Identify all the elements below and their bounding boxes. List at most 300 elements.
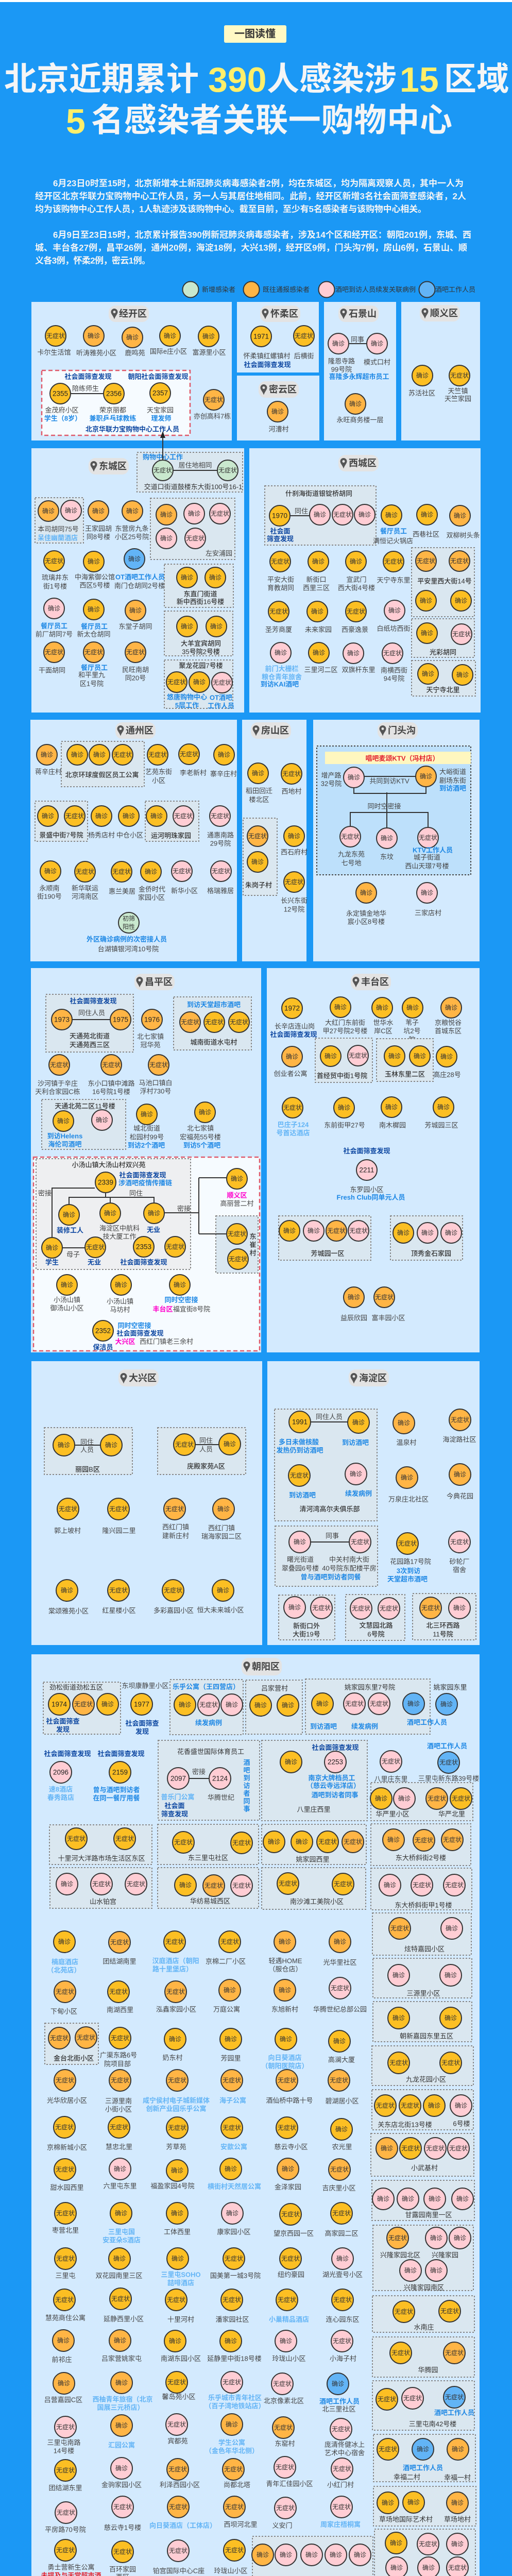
- cases row: 到访5个酒吧: [183, 1142, 220, 1149]
- box: 文慧园北路6号院: 文慧园北路: [359, 1622, 393, 1629]
- box: 清河湾高尔夫俱乐部: 续发病例: [345, 1490, 372, 1497]
- highlighted cluster: 小汤山镇: 大兴区: [115, 1337, 135, 1346]
- box: 东直门街道: 确诊: [181, 574, 193, 581]
- cases row: 大红门东前街: [325, 1019, 365, 1026]
- box: 小武基村: [371, 2133, 474, 2176]
- cases row: 确诊: [406, 1004, 419, 1011]
- cases: [243, 326, 314, 369]
- box: 曙光街道与中关村南大街: 中关村南大街: [329, 1556, 369, 1563]
- case: 冠华苑: 冠华苑: [140, 1041, 161, 1049]
- cases row: 无症状: [109, 1505, 128, 1513]
- box: 兴隆家园: 确诊: [404, 2267, 417, 2274]
- cases row: [37, 861, 234, 902]
- box: 三里屯南42号楼: 酒吧工作人员: [434, 2409, 474, 2416]
- box: 水南庄: 无症状: [440, 2307, 459, 2315]
- box: 左安浦园: 无症状: [211, 510, 229, 517]
- box: 什刹海街道: 确诊: [359, 511, 371, 518]
- case: 台湖镇银河湾10号院: 阳性: [123, 923, 135, 930]
- box: 八里庄西里: （慈云寺远洋店）: [306, 1782, 360, 1790]
- cases: 杨秀店村, 中仓小区: 确诊: [95, 812, 108, 820]
- box: 聚龙花园7号楼: 无症状: [213, 679, 231, 686]
- grid row 15: 无症状: [225, 2546, 244, 2554]
- cases row: 西巷社区: [413, 531, 439, 538]
- grid row 9: [45, 2288, 360, 2324]
- box: 朝新嘉园东里五区: 朝新嘉园东里五区: [400, 2032, 453, 2040]
- cases row: 确诊: [88, 606, 100, 613]
- box: 北京环球度假区员工公寓: [61, 741, 144, 787]
- cases row: 寨辛庄村: [210, 770, 237, 778]
- case: 台湖镇银河湾10号院: 初筛: [123, 914, 135, 922]
- box: 运河明珠家园: 确诊: [150, 812, 163, 820]
- grid row 2: 无症状: [56, 1988, 74, 1995]
- box: 天通北苑二区11号楼: [42, 1099, 126, 1149]
- grid row 1: [47, 1931, 357, 1974]
- box: 幸福二村, 幸福一村: 无症状: [379, 2445, 397, 2453]
- grid row 6: 无症状: [56, 2165, 74, 2173]
- box: 景盛中街7号院: 无症状: [65, 812, 84, 820]
- cases row: 确诊: [252, 770, 264, 777]
- highlighted cluster: 华联力宝购物中心: 理发师: [151, 414, 172, 422]
- box: 花香盛世国际体育员工: 筛查发现: [161, 1810, 188, 1818]
- grid row 2: 万庭公寓: [213, 2005, 240, 2013]
- cases row: 无症状: [180, 750, 198, 758]
- grid row 11: 西柚青年旅宿（北京: [92, 2396, 153, 2403]
- cases row: 坑2号: [403, 1027, 421, 1035]
- case: 王家园胡同8号楼: 确诊: [92, 507, 105, 515]
- cases row: 确诊: [44, 868, 57, 875]
- heading: 朝阳区: [242, 1658, 282, 1675]
- cases row: 确诊: [199, 1109, 211, 1116]
- cases: 今典花园: [447, 1492, 473, 1500]
- box: 天通苑西三区: 同住人员: [78, 1009, 105, 1017]
- cases row: 确诊: [385, 512, 398, 519]
- cases: 八里庄东里, 三里屯新东路: 酒吧工作人员: [427, 1742, 467, 1750]
- box: 姚家园东里7号院: 确诊: [316, 1700, 329, 1707]
- cases: 无症状: [450, 371, 469, 379]
- highlighted cluster: 小汤山镇: 确诊: [63, 1211, 75, 1218]
- cases row: 恒大未来城小区: [197, 1606, 244, 1614]
- highlighted cluster: 华联力宝购物中心: 2356: [106, 389, 122, 398]
- box: 东直门街道: 东直门街道: [183, 590, 217, 598]
- grid row 15: 玲珑山小区: [214, 2567, 248, 2575]
- location row: 无症状: [46, 332, 65, 340]
- grid row 14: 无症状: [169, 2503, 187, 2511]
- cases row: 红星楼小区: [102, 1606, 136, 1615]
- box: 九龙花园小区: [372, 2046, 473, 2086]
- box: 本司胡同75号: 本司胡同75号: [38, 526, 79, 533]
- box: 唱吧麦颂KTV cluster: 七号地: [341, 859, 362, 867]
- title: 区域: [444, 61, 509, 97]
- box: 姚家园东里7号院: 无症状: [345, 1700, 364, 1707]
- box: 小武基村: 小武基村: [411, 2164, 438, 2172]
- cases row: 无症状: [173, 867, 191, 875]
- box: 白家庄东里: 无症状: [448, 2564, 467, 2571]
- cases row: 和平里九: [78, 671, 105, 679]
- box: 十里河大洋路: [49, 1825, 152, 1865]
- box: 兴隆家园: 兴隆家园: [432, 2251, 458, 2259]
- cases row: 16号院1号楼: [92, 1088, 130, 1095]
- highlighted cluster: 小汤山镇: 确诊: [231, 1175, 243, 1182]
- highlighted cluster: 小汤山镇: 崔: [249, 1241, 257, 1249]
- cases: 益辰欣园, 富丰园小区: [340, 1287, 405, 1322]
- box: 清河湾高尔夫俱乐部: 无症状: [290, 1471, 309, 1479]
- cases row: 隆兴园二里: [102, 1527, 136, 1534]
- grid row 3: 向日葵酒店: [268, 2054, 302, 2062]
- location row: [37, 326, 226, 357]
- highlighted cluster: 小汤山镇: 无症状: [228, 1230, 246, 1238]
- box: 姚家园西里: 姚家园西里: [296, 1856, 330, 1863]
- grid row 15: 铂宫国际中心C座: [153, 2567, 204, 2575]
- box: 曙光街道与中关村南大街: 40号院东配楼平房: [322, 1564, 377, 1572]
- grid row 7: 确诊: [115, 2210, 127, 2217]
- box: 朱岗子村: 无症状: [248, 832, 267, 840]
- case: 冠华苑: 1976: [144, 1016, 160, 1023]
- grid row 8: 无症状: [281, 2255, 300, 2262]
- box: 幸福二村, 幸福一村: 幸福二村: [394, 2473, 420, 2481]
- box: 北三环西路11号院: 确诊: [453, 1604, 466, 1612]
- box: 南沙滩工美院小区: 南沙滩工美院小区: [290, 1898, 344, 1905]
- box: 乐乎公寓: 无症状: [199, 1701, 218, 1708]
- box: 草场地: 确诊: [407, 2499, 420, 2506]
- highlighted cluster: 小汤山镇: 同时空密接: [117, 1322, 151, 1329]
- highlighted cluster: 小汤山镇: 确诊: [46, 1244, 58, 1251]
- intro paragraph 1: [35, 178, 466, 214]
- box: 北京环球度假区员工公寓: 北京环球度假区员工公寓: [65, 771, 139, 779]
- box: 劲松五区: 劲松街道劲松五区: [49, 1684, 103, 1691]
- grid row 9: 无症状: [333, 2296, 352, 2303]
- box: 安家楼村: 确诊: [305, 2551, 318, 2558]
- box: 关东店北街: [372, 2090, 473, 2130]
- grid row 1: 楠庭酒店: [52, 1958, 78, 1966]
- box: 山水铂宫: 无症状: [92, 1880, 111, 1888]
- case: 王家园胡同8号楼: 王家园胡: [85, 524, 112, 533]
- heading: 经开区: 经开区: [119, 309, 147, 319]
- highlighted cluster: 小汤山镇: 2339: [98, 1179, 113, 1186]
- cases row: 双柳树头条: [446, 532, 480, 539]
- grid row 9: 无症状: [223, 2296, 241, 2303]
- cases row: 确诊: [48, 605, 60, 612]
- case: 姚家园东里: 确诊: [440, 1701, 453, 1708]
- box: 花香盛世国际体育员工: 2124: [212, 1774, 228, 1783]
- grid row 15: 无症状: [169, 2547, 187, 2554]
- box: 城南街道水屯村: 无症状: [230, 1018, 248, 1026]
- box: 三里屯南42号楼: 三里屯南42号楼: [409, 2420, 456, 2428]
- title: 5: [66, 102, 86, 141]
- box: 城南街道水屯村: [174, 997, 251, 1050]
- grid row 1: 轻遇HOME: [268, 1957, 302, 1965]
- highlighted cluster: 小汤山镇: 无症状: [166, 1243, 184, 1250]
- cases row: 前厂胡同7号: [36, 631, 73, 638]
- grid row 4: 无症状: [111, 2076, 129, 2084]
- cases row: 李老新村: [180, 769, 207, 777]
- heading: 顺义区: 顺义区: [430, 308, 458, 318]
- box: 朝新嘉园东里五区: 确诊: [445, 2014, 457, 2022]
- box: 东直门街道: 确诊: [209, 574, 221, 581]
- grid row 3: 确诊: [169, 2036, 181, 2043]
- box: 十里河大洋路: 无症状: [67, 1835, 86, 1842]
- box: 平安里西大街14号: 无症状: [417, 557, 435, 565]
- box: 北三环西路11号院: 北三环西路: [426, 1622, 460, 1629]
- title: 北京近期累计: [4, 61, 199, 97]
- box: 天通北苑二区11号楼: 海伦司酒吧: [48, 1141, 82, 1148]
- grid row 12: 三里屯南路: [47, 2439, 81, 2446]
- case: 姚家园东里: 姚家园东里: [433, 1684, 467, 1691]
- grid row 3: 无症状: [111, 2034, 129, 2042]
- highlighted cluster: 小汤山镇: 确诊: [115, 1281, 127, 1289]
- cases row: 长辛店连山岗: [275, 1022, 315, 1030]
- box: 曙光街道与中关村南大街: 曾与酒吧到访者同餐: [300, 1573, 361, 1581]
- box: 聚龙花园7号楼: 确诊: [193, 679, 206, 686]
- title: 390: [208, 60, 266, 99]
- box: 唱吧麦颂KTV cluster: KTV工作人员: [413, 846, 453, 854]
- box: 唱吧麦颂KTV cluster: 确诊: [348, 774, 360, 781]
- cases: [408, 365, 471, 403]
- cases: 西石府村, 长兴东街: 12号院: [284, 906, 304, 913]
- cases: 确诊: [398, 1419, 410, 1427]
- cases row: 西红门镇: [162, 1523, 189, 1531]
- highlighted cluster: 华联力宝购物中心: 社会面筛查发现: [64, 373, 112, 380]
- box: 劲松五区: 发现: [56, 1726, 70, 1733]
- box: 吕家营村: [246, 1680, 302, 1734]
- box: 姚家园西里: 无症状: [344, 1838, 362, 1845]
- box: 花香盛世国际体育员工: 到: [243, 1774, 250, 1782]
- box: 姚家园东里7号院: 酒吧工作人员: [407, 1719, 447, 1726]
- highlighted cluster: 华联力宝购物中心: 学生（8岁）: [44, 414, 81, 422]
- box: 北三环西路11号院: 11号院: [433, 1630, 453, 1638]
- linked cases: 同事: 确诊: [371, 340, 383, 347]
- grid row 11: 确诊: [332, 2380, 344, 2387]
- cases row: 南门仓胡同2号楼: [114, 582, 165, 589]
- grid row 14: 无症状: [57, 2509, 75, 2516]
- cases row: 餐厅员工: [81, 664, 108, 672]
- box: 平安里西大街14号: 确诊: [420, 597, 432, 604]
- box: 东大桥斜街2号楼: 无症状: [443, 1836, 462, 1843]
- cases row: [346, 883, 441, 925]
- heading: 怀柔区: 怀柔区: [270, 309, 298, 319]
- cases row: 南木樨园: [379, 1121, 406, 1129]
- grid row 11: [44, 2371, 360, 2413]
- box: 丽园B区: 确诊: [58, 1442, 70, 1449]
- box: 新街口外大街19号: 无症状: [312, 1604, 331, 1612]
- grid row 12: [47, 2414, 365, 2456]
- box: 交道口街道: 交道口街道鼓楼东大街100号16-1: [144, 483, 242, 490]
- panel: 石景山: [324, 302, 396, 440]
- case: 永旺商务楼一层: 确诊: [349, 400, 362, 408]
- case: 永旺商务楼一层: 永旺商务楼一层: [336, 416, 384, 423]
- box: 安家楼村: 确诊: [280, 2551, 292, 2558]
- highlighted cluster: 小汤山镇: 社会面筛查发现: [120, 1258, 167, 1266]
- grid row 13: 确诊: [115, 2465, 128, 2472]
- cases: 2096, 2159: 社会面筛查发现: [97, 1750, 145, 1758]
- box: 劲松五区: [43, 1682, 121, 1734]
- grid row 12: （金色年华北侧）: [205, 2447, 259, 2454]
- cases: [388, 1409, 476, 1503]
- cases: 确诊: [416, 372, 429, 379]
- highlighted cluster: 华联力宝购物中心: 2357: [152, 389, 168, 397]
- cases row: 确诊: [313, 649, 325, 656]
- cases row: 确诊: [385, 1104, 398, 1111]
- box: 水南庄: 无症状: [395, 2308, 413, 2315]
- cases row: OT酒吧工作人员: [115, 573, 165, 581]
- box: 顶秀金石家园: 确诊: [445, 1229, 457, 1236]
- box: 首经贸中街1号院: 首经贸中街1号院: [317, 1072, 367, 1080]
- box: 乐乎公寓: [170, 1680, 243, 1735]
- grid row 8: 三里屯SOHO: [161, 2271, 201, 2278]
- box: 十里河大洋路: 十里河大洋路市场生活区东区: [58, 1855, 145, 1862]
- box: 花香盛世国际体育员工: 普乐门公寓: [161, 1793, 195, 1801]
- cases row: 确诊: [88, 558, 100, 565]
- cases row: 无症状: [59, 1505, 77, 1513]
- box: 运河明珠家园: [145, 801, 199, 841]
- grid row 7: 工体西里: [164, 2228, 191, 2236]
- grid row 10: 确诊: [280, 2337, 292, 2345]
- case: 姚家园东里: [433, 1684, 467, 1715]
- highlighted cluster: 小汤山镇: 无症状: [86, 1243, 105, 1251]
- grid row 8: 确诊: [172, 2255, 184, 2262]
- cases: 无症状: [451, 1416, 469, 1423]
- grid row 2: [50, 1977, 367, 2015]
- box: 劲松五区: 确诊: [101, 1701, 114, 1708]
- case: 东坝康静里小区: [122, 1682, 169, 1735]
- grid row 3: 确诊: [280, 2036, 292, 2043]
- cases row: 粮仓青年旅舍: [262, 673, 302, 681]
- grid row 5: 无症状: [110, 2123, 128, 2131]
- box: 顶秀金石家园: 顶秀金石家园: [411, 1250, 451, 1257]
- box: 什刹海街道: 同住: [295, 507, 308, 515]
- cases row: 到访2个酒吧: [128, 1142, 165, 1149]
- box: 山水铂宫: 无症状: [127, 1880, 145, 1888]
- cases: 天竺家园: [445, 395, 471, 403]
- cases: 宿舍: [453, 1566, 466, 1573]
- box: 华严里小区, 华严北里: 华严里小区: [376, 1810, 409, 1818]
- location row: 卡尔生活馆: [37, 348, 71, 357]
- grid row 3: 高澜大厦: [328, 2056, 355, 2064]
- box: 聚龙花园7号楼: 工作人员: [208, 702, 234, 710]
- box: 三源里小区: 确诊: [445, 1972, 457, 1979]
- box: 华纺易城西区: 确诊: [179, 1882, 192, 1889]
- box: 草场地: 确诊: [382, 2499, 394, 2506]
- grid row 10: 确诊: [114, 2337, 126, 2344]
- case: 通惠南路29号院: 通惠南路: [207, 832, 234, 839]
- highlighted cluster: 小汤山镇: 顺义区: [227, 1191, 247, 1199]
- box: 天通苑西三区: 天通苑西三区: [70, 1041, 110, 1049]
- heading: 经开区: [109, 306, 149, 322]
- box: 聚龙花园7号楼: 无症状: [167, 678, 186, 686]
- box: 兴隆家园: [373, 2225, 473, 2292]
- box: 大羊宜宾胡同: [164, 611, 233, 656]
- box: 金台北街小区: 无症状: [77, 2033, 95, 2041]
- box: 花香盛世国际体育员工: 酒: [243, 1759, 250, 1766]
- cases: 苏活社区: [408, 389, 435, 397]
- box: 乐乎公寓: 确诊: [179, 1701, 191, 1708]
- cases row: 建新庄村: [162, 1532, 189, 1539]
- cases row: 餐厅员工: [41, 622, 67, 630]
- grid row 6: 甜水园西里: [50, 2183, 84, 2192]
- box: 首经贸中街1号院: 确诊: [325, 1053, 337, 1060]
- grid row 4: 创新产业园乐乎公寓: [146, 2105, 207, 2112]
- legend: 既往通报感染者: [263, 285, 310, 294]
- cases row: [48, 1580, 244, 1615]
- box: 姚家园西里: 无症状: [318, 1838, 337, 1845]
- grid row 9: 慧苑商住公寓: [45, 2314, 86, 2321]
- location row: 确诊: [202, 333, 215, 340]
- cases row: 确诊: [338, 1104, 350, 1111]
- box: 花香盛世国际体育员工: 同: [243, 1797, 250, 1805]
- grid row 2: 下甸小区: [50, 2007, 77, 2015]
- grid row 14: 无症状: [276, 2504, 295, 2512]
- box: 花香盛世国际体育员工: 华腾世纪: [208, 1794, 234, 1801]
- title: 人感染涉: [267, 61, 397, 97]
- box: 姚家园东里7号院: 确诊: [407, 1700, 420, 1707]
- grid row 7: [52, 2202, 359, 2244]
- box: 水南庄: 水南庄: [414, 2324, 434, 2331]
- box: 交道口街道: [137, 452, 243, 492]
- cases row: 西豪逸景: [342, 625, 368, 634]
- box: 大羊宜宾胡同: 确诊: [181, 623, 193, 630]
- box: 庑殿家苑A区: 人员: [199, 1446, 213, 1453]
- cases: 八里庄东里, 三里屯新东路: 无症状: [439, 1758, 458, 1766]
- heading: 密云区: 密云区: [269, 384, 297, 395]
- cases row: 小区: [152, 777, 165, 784]
- box: 花香盛世国际体育员工: 事: [243, 1805, 250, 1812]
- cases row: 94号院: [384, 675, 404, 682]
- grid row 1: 汉庭酒店（朝阳: [152, 1957, 199, 1965]
- grid row 2: 无症状: [109, 1988, 128, 1995]
- cases row: 艺苑东街: [145, 768, 172, 776]
- highlighted cluster: 华联力宝购物中心: 陪练师生: [72, 384, 99, 393]
- box: 八里庄西里: 八里庄西里: [297, 1805, 331, 1814]
- box: 金台北街小区: 无症状: [50, 2034, 69, 2042]
- box: 三里屯南42号楼: 无症状: [445, 2393, 464, 2401]
- box: 关东店北街: 确诊: [428, 2102, 440, 2109]
- cases: 益辰欣园, 富丰园小区: 益辰欣园: [340, 1314, 367, 1322]
- case: 亦创高科7栋: 亦创高科7栋: [194, 412, 231, 420]
- grid row 12: 东窑村: [275, 2440, 295, 2447]
- highlighted cluster: 小汤山镇: 高丽营二村: [220, 1199, 254, 1208]
- box: 花香盛世国际体育员工: 社会面: [164, 1802, 185, 1809]
- box: 东三里屯社区: 无症状: [232, 1839, 251, 1846]
- box: 光彩胡同: 确诊: [421, 630, 433, 637]
- cases row: [54, 1498, 242, 1540]
- highlighted cluster: 华联力宝购物中心: 2355: [53, 389, 68, 398]
- cases: 砂轮厂: [449, 1558, 470, 1565]
- cases: 天竺镇: [448, 387, 468, 395]
- box: 玉林东里二区: 玉林东里二区: [385, 1071, 425, 1078]
- grid row 6: [50, 2158, 356, 2192]
- box: 聚龙花园7号楼: [164, 660, 234, 710]
- linked cases: 同事: 喜隆多永辉超市员工: [329, 373, 389, 380]
- heading: 房山区: [251, 722, 291, 739]
- box: 北京环球度假区员工公寓: 确诊: [93, 751, 106, 758]
- title: 15: [400, 60, 439, 99]
- box: 左安浦园: 确诊: [160, 511, 173, 518]
- cases row: 松园村99号: [130, 1133, 164, 1141]
- box: 首经贸中街1号院: 无症状: [349, 1052, 367, 1059]
- case: 高庄28号: 高庄28号: [433, 1071, 461, 1079]
- box: 炫特嘉园小区: 确诊: [446, 1925, 458, 1932]
- box: 山水铂宫: 山水铂宫: [90, 1898, 116, 1905]
- box: 文慧园北路6号院: 6号院: [367, 1630, 385, 1638]
- grid row 13: 团结湖东里: [48, 2484, 82, 2492]
- box: 东大桥斜街2号楼: 无症状: [415, 1836, 433, 1844]
- box: 朱岗子村: [243, 818, 277, 895]
- highlighted cluster: 小汤山镇: 无业: [88, 1258, 101, 1266]
- cases row: 平安大街: [267, 576, 294, 583]
- cases row: 西里三区: [303, 584, 330, 591]
- heading: 大兴区: [118, 1369, 159, 1386]
- box: 姚家园东里7号院: 续发病例: [351, 1723, 378, 1730]
- tag: 一图读懂: 一图读懂: [234, 28, 276, 40]
